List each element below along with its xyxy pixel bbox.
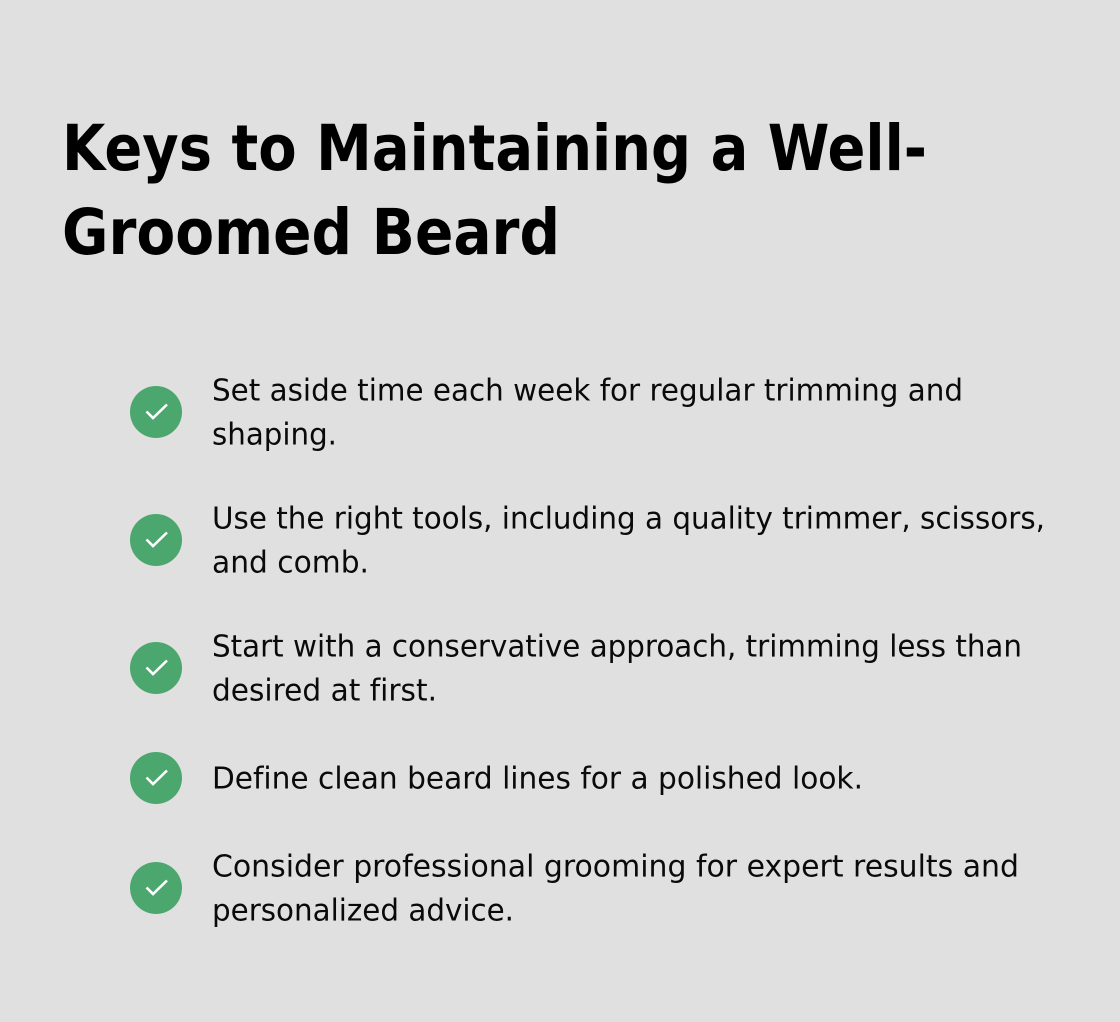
icon: check mark 4: [130, 752, 182, 804]
item 3 text: Start with a conservative approach, trimming less than: [212, 630, 1022, 664]
item 1: regular trimming: [130, 374, 963, 452]
icon: check mark 3: [130, 642, 182, 694]
item 2: right tools: [130, 502, 1045, 580]
item 2 text: and comb.: [212, 546, 369, 580]
item 1 text: Set aside time each week for regular trimming and: [212, 374, 963, 408]
item 1 text: shaping.: [212, 418, 337, 452]
item 3: conservative approach: [130, 630, 1022, 708]
item 3 text: desired at first.: [212, 674, 437, 708]
item 5: professional grooming: [130, 850, 1019, 928]
item 4: clean lines: [130, 752, 863, 804]
item 5 text: personalized advice.: [212, 894, 514, 928]
item 3 text: [212, 630, 1022, 708]
icon: check mark 2: [130, 514, 182, 566]
item 1 text: [212, 374, 963, 452]
item 2 text: Use the right tools, including a quality trimmer, scissors,: [212, 502, 1045, 536]
title: Groomed Beard: [62, 196, 560, 269]
item 4 text: Define clean beard lines for a polished look.: [212, 762, 863, 796]
title: Keys to Maintaining a Well-: [62, 112, 927, 185]
icon: check mark 1: [130, 386, 182, 438]
checklist: [130, 374, 1045, 928]
title: [62, 112, 927, 269]
item 5 text: [212, 850, 1019, 928]
icon: check mark 5: [130, 862, 182, 914]
item 5 text: Consider professional grooming for expert results and: [212, 850, 1019, 884]
item 2 text: [212, 502, 1045, 580]
